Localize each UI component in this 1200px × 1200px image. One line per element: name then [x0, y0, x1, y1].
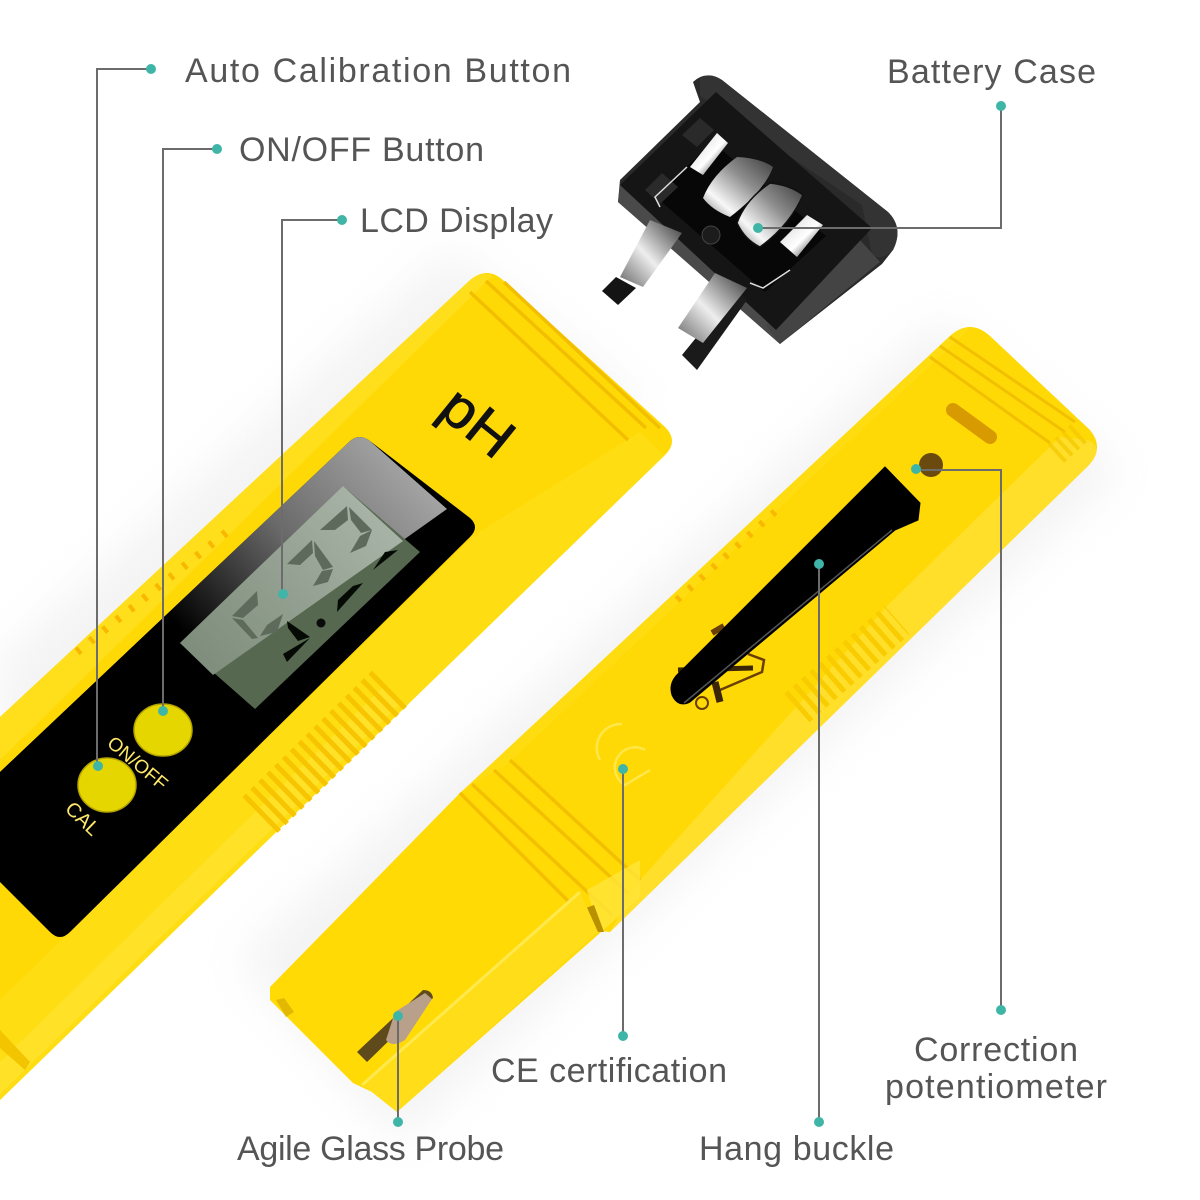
label: lcd display: LCD Display [360, 202, 553, 240]
cap rings [460, 760, 640, 930]
label: correction potentiometer: Correction [914, 1031, 1078, 1069]
leader: battery case [753, 101, 1006, 233]
upper ribs [677, 510, 777, 600]
label: auto calibration button: Auto Calibration Button [185, 52, 571, 90]
upper ribs [77, 532, 227, 652]
leader: auto calibration [93, 64, 156, 771]
meter: right body with cap [270, 327, 1097, 1112]
label: ce certification: CE certification [491, 1052, 727, 1090]
correction potentiometer hole [919, 453, 943, 477]
battery case [602, 75, 897, 370]
hang buckle clip [671, 467, 920, 704]
lower side band [610, 437, 1096, 932]
end ribs [930, 337, 1075, 443]
screw [702, 226, 720, 244]
calibration button [78, 758, 136, 812]
pH mark: pH [429, 373, 527, 470]
label: on/off button: ON/OFF Button [239, 131, 484, 169]
body shell [458, 327, 1097, 932]
label: agile glass probe: Agile Glass Probe [237, 1130, 504, 1168]
end ribs [470, 281, 660, 440]
clip logo [678, 626, 764, 709]
upper side band [458, 328, 970, 795]
button label: on/off: ON/OFF [103, 733, 171, 795]
batteries [703, 157, 773, 217]
battery contact [690, 133, 728, 175]
leader: probe [393, 1011, 403, 1127]
button label: cal: CAL [61, 798, 104, 841]
meter: left body with display [0, 273, 672, 1100]
lcd digits [232, 506, 398, 662]
CE mark [597, 724, 650, 785]
cap lower side [362, 892, 598, 1112]
body shell [0, 273, 672, 1100]
label: correction potentiometer [885, 1031, 1107, 1106]
left spring clip [602, 277, 636, 305]
leader: lcd [278, 215, 347, 599]
upper side band [0, 274, 492, 760]
panel reflection [0, 437, 447, 772]
leader: on/off [158, 144, 222, 716]
lower ribs [260, 686, 392, 815]
leader: correction potentiometer [911, 464, 1006, 1015]
label: correction potentiometer: potentiometer [885, 1068, 1107, 1106]
lcd display [180, 486, 420, 709]
cap [270, 760, 640, 1112]
label: hang buckle: Hang buckle [699, 1130, 894, 1168]
lower side band [0, 432, 664, 1100]
leader: hang buckle [814, 559, 824, 1127]
on/off button [134, 704, 192, 756]
lower ribs [797, 620, 897, 708]
glass probe window [357, 990, 433, 1062]
black panel [0, 437, 475, 937]
right spring clip [682, 290, 747, 370]
lanyard slot [953, 410, 990, 437]
leader: ce [618, 764, 628, 1041]
cap end opening [276, 998, 294, 1017]
label: battery case: Battery Case [887, 53, 1096, 91]
